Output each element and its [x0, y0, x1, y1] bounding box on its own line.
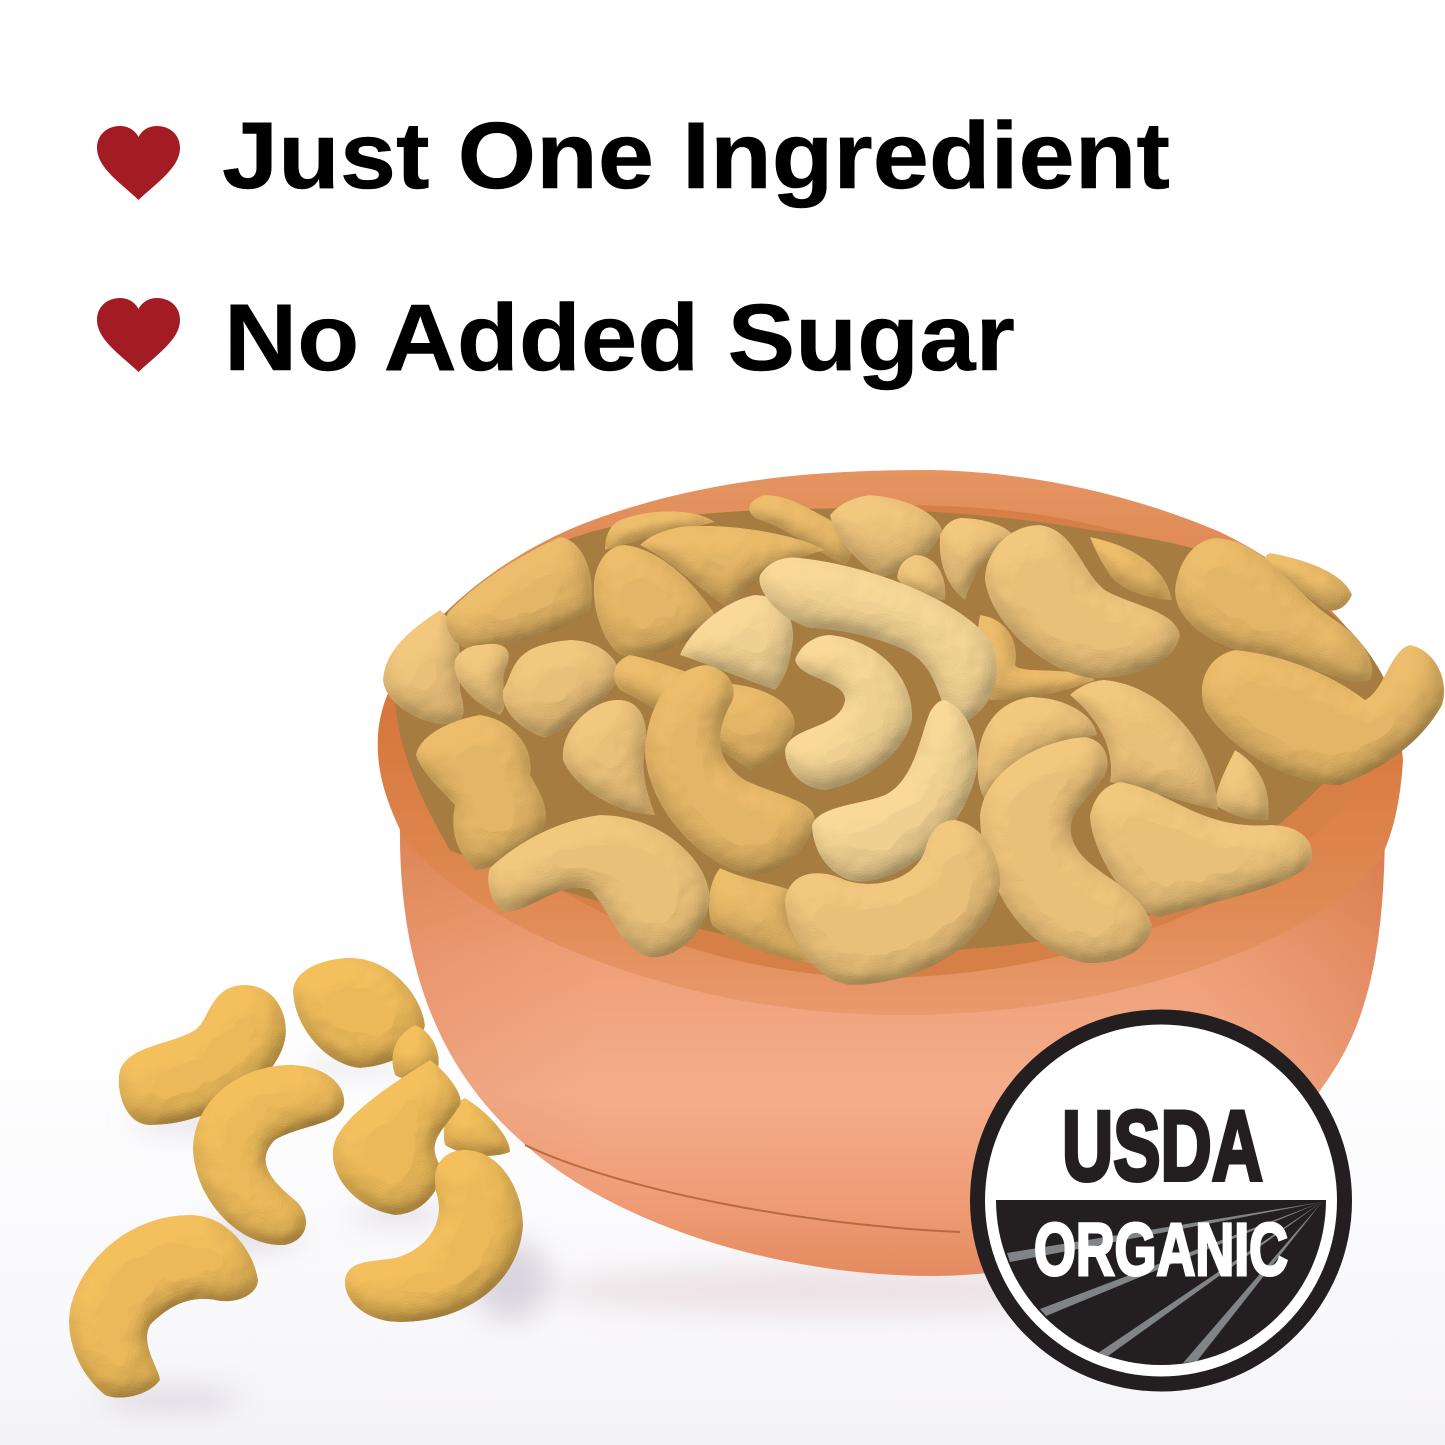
- floor shadows: [100, 1060, 1150, 1410]
- cashew: [1175, 538, 1372, 682]
- cashew: [454, 644, 509, 715]
- cashew: [980, 737, 1152, 963]
- cashew: [444, 1098, 510, 1156]
- cashew: [985, 525, 1180, 678]
- cashew: [680, 595, 793, 690]
- cashew: [978, 697, 1097, 800]
- cashew: [345, 1150, 523, 1322]
- benefit line: just one ingredient: [97, 103, 1170, 209]
- field rays: [1007, 1202, 1322, 1363]
- cashew: [1090, 537, 1172, 600]
- cashew: [645, 665, 815, 875]
- cashew: [1202, 645, 1444, 785]
- cashew: [1264, 553, 1352, 611]
- cashew: [812, 700, 978, 882]
- cashew: [759, 558, 997, 725]
- cashew: [193, 1065, 344, 1245]
- cashew pile in bowl: [383, 495, 1444, 985]
- cashew: [977, 615, 1095, 700]
- loose cashews on table: [69, 958, 523, 1398]
- seal inner disc: [985, 1024, 1337, 1376]
- cashew: [940, 518, 1015, 600]
- cashew: [1070, 680, 1218, 810]
- bowl side shading: [400, 820, 1385, 1276]
- cashew: [785, 820, 1000, 985]
- cashew: [383, 610, 464, 724]
- benefit line: no added sugar: [97, 285, 1015, 391]
- cashew: [897, 555, 945, 600]
- heading text: No Added Sugar: [224, 285, 1015, 391]
- bowl rim: [378, 470, 1403, 1015]
- cashew: [69, 1215, 258, 1398]
- cashew: [416, 715, 546, 870]
- cashew: [830, 495, 942, 577]
- cashew: [119, 985, 286, 1125]
- seal outer ring: [970, 1010, 1352, 1392]
- cashew: [1215, 750, 1269, 820]
- USDA wordmark: USDA: [1062, 1090, 1263, 1201]
- clay bowl: [378, 470, 1403, 1276]
- USDA organic seal: [970, 1010, 1352, 1392]
- cashew: [503, 640, 620, 738]
- cashew: [594, 545, 715, 656]
- icon: heart: [97, 298, 180, 372]
- cashew: [446, 537, 592, 650]
- cashew: [293, 958, 425, 1068]
- cashew: [392, 1025, 439, 1079]
- cashew: [333, 1060, 461, 1215]
- heading text: Just One Ingredient: [222, 103, 1170, 209]
- icon: heart: [97, 126, 180, 200]
- pile backing: [395, 509, 1385, 952]
- bowl base groove: [525, 1145, 960, 1232]
- bowl interior: [420, 505, 1375, 978]
- cashew: [1090, 782, 1312, 917]
- seal dark lower half: [996, 1200, 1326, 1365]
- cashew: [709, 868, 820, 965]
- bowl body: [400, 820, 1385, 1276]
- cashew: [785, 635, 912, 790]
- cashew: [605, 511, 715, 550]
- cashew: [488, 815, 710, 957]
- cashew: [614, 655, 795, 770]
- ORGANIC wordmark: ORGANIC: [1034, 1208, 1288, 1291]
- cashew: [640, 526, 825, 610]
- cashew: [563, 700, 655, 815]
- cashew: [749, 495, 852, 565]
